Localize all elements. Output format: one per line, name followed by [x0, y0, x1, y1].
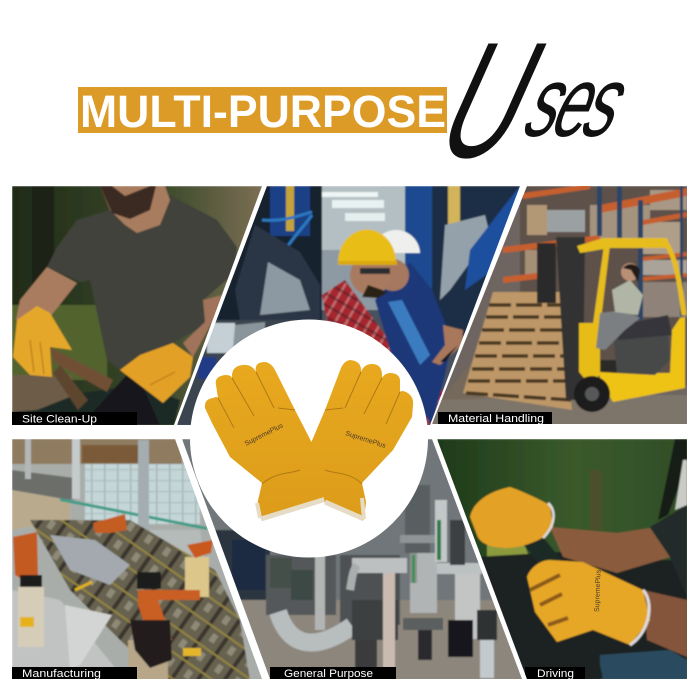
- label: material handling: [438, 412, 552, 425]
- left glove: [205, 362, 326, 519]
- title script: uses: U: [414, 9, 570, 193]
- label: driving: [525, 667, 585, 680]
- panel: industrial workers: [177, 186, 522, 426]
- panel: general purpose: [182, 439, 524, 681]
- panel: material handling: [432, 184, 688, 426]
- title: [78, 9, 663, 193]
- glove brand text: driving: SupremePlus: [594, 569, 602, 612]
- label: general purpose: [270, 667, 396, 680]
- title text: multi-purpose: MULTI-PURPOSE: [80, 86, 446, 137]
- label: site clean-up: Site Clean-Up: [22, 414, 97, 426]
- panel: manufacturing: [12, 439, 264, 681]
- right glove: [311, 360, 413, 520]
- brand text: left glove: SupremePlus: [244, 422, 285, 448]
- label: site clean-up: [12, 412, 137, 426]
- label: manufacturing: Manufacturing: [22, 668, 101, 680]
- title script: uses: ses: [509, 45, 647, 157]
- panel: site clean-up: [12, 186, 264, 426]
- brand text: right glove: SupremePlus: [344, 430, 387, 450]
- label: manufacturing: [12, 667, 137, 680]
- label: general purpose: General Purpose: [284, 668, 373, 680]
- label: material handling: Material Handling: [448, 413, 544, 425]
- panel: driving: [437, 439, 688, 680]
- title banner: [78, 87, 447, 133]
- label: driving: Driving: [537, 668, 574, 680]
- centre circle with gloves: [190, 320, 428, 558]
